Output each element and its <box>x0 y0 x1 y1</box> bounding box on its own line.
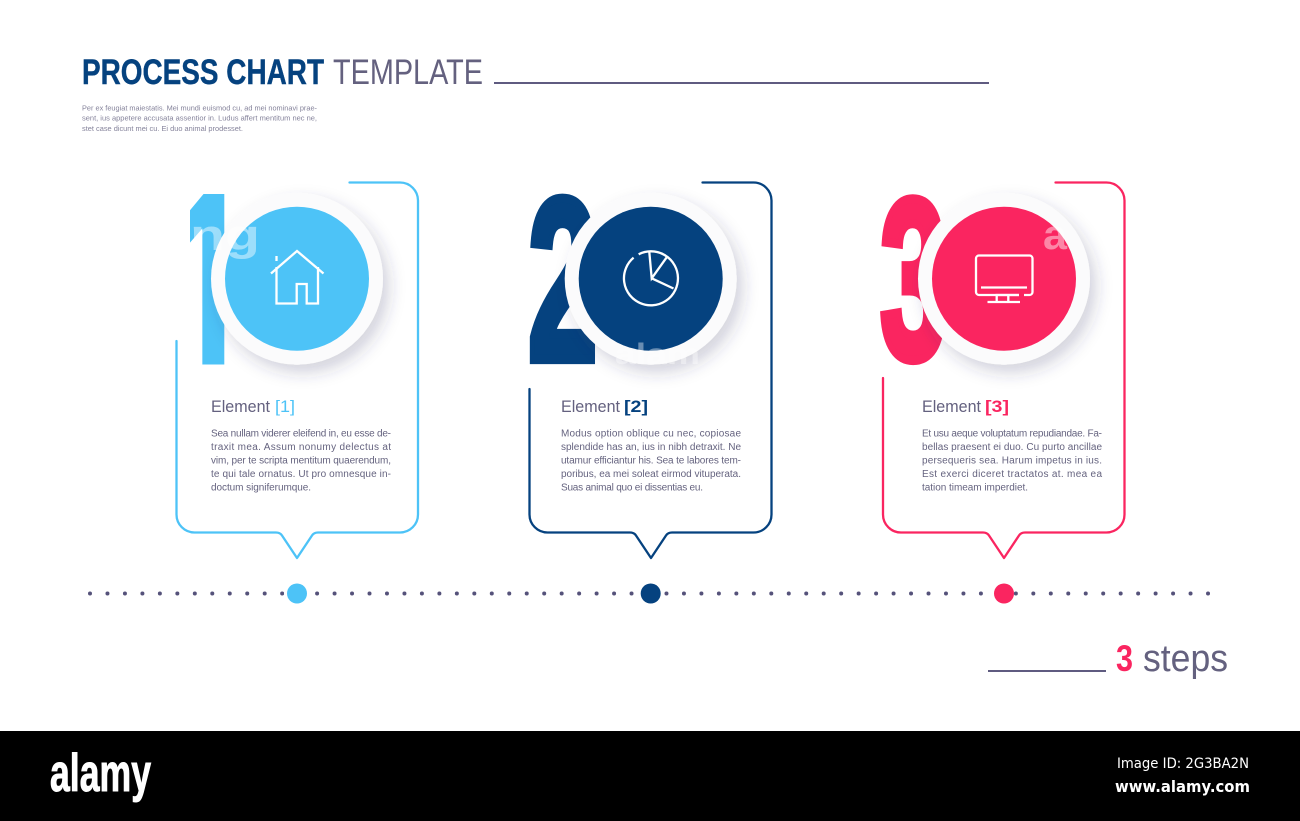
number 1: 1 <box>165 131 254 460</box>
dotted timeline <box>90 580 1209 606</box>
body text 3: persequeris sea. Harum impetus in ius. <box>922 456 1102 466</box>
intro text block: Per ex feugiat maiestatis. Mei mundi euismod cu, ad mei nominavi prae- <box>82 104 317 112</box>
panel: step 3 <box>880 152 1124 558</box>
body text 2: Suas animal quo ei dissentias eu. <box>561 482 703 494</box>
icon: pie chart <box>624 251 678 305</box>
body text 1: vim, per te scripta mentitum quaerendum, <box>211 456 391 466</box>
intro text block: sent, ius appetere accusata assentior in. Ludus affert mentitum nec ne, <box>82 114 317 122</box>
timeline marker 2 <box>638 580 664 606</box>
timeline marker 3 <box>994 584 1014 604</box>
card outline 1 <box>176 182 418 558</box>
watermark fragment: a <box>1043 211 1068 258</box>
body text 3: bellas praesent ei duo. Cu purto ancillae <box>922 442 1102 453</box>
card outline 3 <box>883 182 1124 558</box>
body text 1 <box>211 428 391 494</box>
body text 1: Sea nullam viderer eleifend in, eu esse de- <box>211 428 391 440</box>
index 1: [1] <box>275 397 295 416</box>
icon: monitor <box>976 256 1032 302</box>
body text 1: traxit mea. Assum nonumy delectus at <box>211 442 391 453</box>
image id: Image ID: 2G3BA2N <box>1117 756 1249 772</box>
body text 3 <box>922 428 1102 494</box>
heading 1: Element <box>211 397 270 416</box>
number 3: 3 <box>880 152 947 407</box>
icon: house <box>271 251 324 304</box>
body text 2: poribus, ea mei soleat eirmod vituperata. <box>561 469 741 480</box>
body text 3: Et usu aeque voluptatum repudiandae. Fa- <box>922 428 1102 440</box>
steps counter <box>988 638 1228 680</box>
intro text block: stet case dicunt mei cu. Ei duo animal prodesset. <box>82 124 243 133</box>
watermark fragment: ng <box>190 211 260 260</box>
watermark fragment: alam <box>615 338 700 371</box>
badge circle 1 <box>211 193 383 365</box>
body text 2: Modus option oblique cu nec, copiosae <box>561 428 741 440</box>
body text 3: tation timeam imperdiet. <box>922 482 1028 494</box>
body text 2: splendide has an, ius in nibh detraxit. Ne <box>561 442 741 453</box>
intro text block <box>82 104 317 133</box>
panel: step 1 <box>175 181 420 560</box>
index 2: [2] <box>624 397 648 416</box>
body text 1: doctum signiferumque. <box>211 482 311 494</box>
body text 3: Est exerci diceret tractatos at. mea ea <box>922 469 1102 480</box>
title: PROCESS CHART <box>82 52 324 92</box>
body text 2: utamur efficiantur his. Sea te labores tem- <box>561 456 741 466</box>
body text 1: te qui tale ornatus. Ut pro omnesque in- <box>211 469 391 480</box>
badge circle 2 <box>565 193 737 365</box>
title: TEMPLATE <box>333 52 483 92</box>
body text 2 <box>561 428 741 494</box>
index 3: [3] <box>985 397 1009 416</box>
heading 3: Element <box>922 397 981 416</box>
website: www.alamy.com <box>1115 777 1250 796</box>
steps counter: steps <box>1143 638 1228 680</box>
badge circle 3 <box>918 193 1090 365</box>
title <box>82 52 989 92</box>
footer bar <box>0 731 1300 821</box>
steps counter: 3 <box>1116 638 1133 679</box>
card outline 2 <box>530 182 772 558</box>
timeline marker 1 <box>284 580 310 606</box>
logo: alamy: alamy <box>50 744 151 803</box>
panel: step 2 <box>528 152 772 558</box>
number 2: 2 <box>528 152 598 409</box>
heading 2: Element <box>561 397 620 416</box>
